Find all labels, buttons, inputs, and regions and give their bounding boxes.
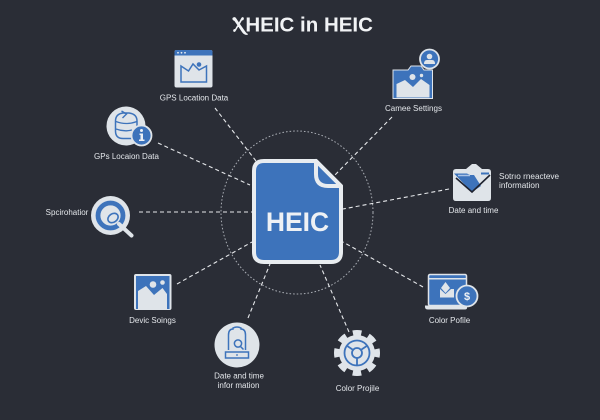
- node: Color Pofile (laptop): [425, 274, 478, 325]
- node: Date and time information (lock search): Date and time: [214, 372, 264, 380]
- node: GPS Location Data (window): GPS Location Data: [160, 94, 229, 102]
- icon: target magnifier: [91, 196, 132, 236]
- dotted orbit ring: [221, 131, 373, 294]
- icon: document search on device: [214, 322, 260, 368]
- node: Date and time (envelope folder): Date and time: [449, 206, 499, 215]
- icon: browser window with image: [174, 50, 212, 88]
- node: Date and time (envelope folder): [449, 164, 560, 215]
- label: Spcirohatior: [46, 208, 89, 217]
- icon: laptop with dollar badge: $: [464, 291, 470, 303]
- icon: envelope: [453, 164, 491, 201]
- dashed connectors: [139, 108, 449, 332]
- node: Camee Settings (photo with user badge): [385, 50, 442, 113]
- node: GPS Location Data (window): [160, 50, 229, 102]
- title: ⲬHEIC in HEIC: [232, 14, 373, 36]
- node: Date and time information (lock search): [214, 322, 264, 390]
- icon: picture frame: [134, 274, 172, 310]
- node: Color Projile (gear): Color Projile: [336, 384, 380, 393]
- node: Color Projile (gear): [336, 334, 380, 393]
- node: GPs Location Data (database): [94, 106, 160, 161]
- icon: database with info badge: [106, 106, 152, 146]
- node: Date and time information (lock search): infor mation: [218, 381, 259, 390]
- central HEIC file icon: [254, 161, 341, 262]
- side note: [499, 172, 560, 190]
- node: Devic Soings (image): [129, 274, 176, 325]
- node: Color Pofile (laptop): Color Pofile: [429, 316, 471, 325]
- icon: photo with user badge: [393, 50, 439, 98]
- node: Spcirohatior (magnifier): [46, 196, 132, 236]
- side note: information: [499, 181, 540, 190]
- central HEIC file icon: HEIC: [266, 207, 329, 237]
- node: Camee Settings (photo with user badge): Camee Settings: [385, 104, 442, 113]
- node: Devic Soings (image): Devic Soings: [129, 316, 176, 325]
- side note: Sotrıo rneacteve: [499, 172, 560, 181]
- node: GPs Location Data (database): GPs Locaion Data: [94, 152, 160, 161]
- icon: gear: [338, 334, 376, 372]
